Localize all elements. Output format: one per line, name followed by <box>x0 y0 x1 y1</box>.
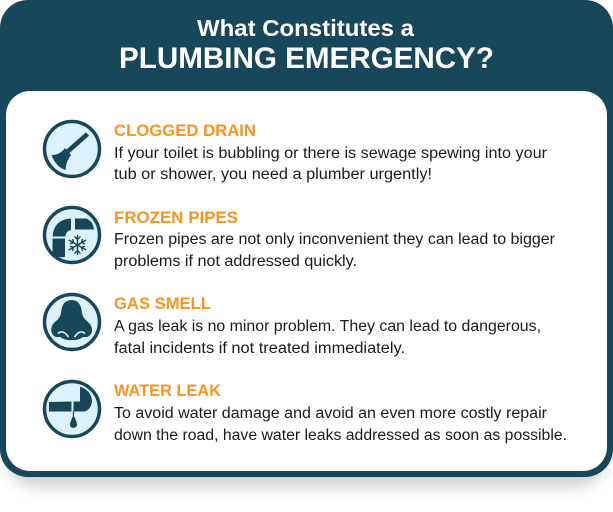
item: clogged drain <box>114 121 547 183</box>
title: What Constitutes a <box>197 15 414 41</box>
item: clogged drain: CLOGGED DRAIN <box>114 121 256 140</box>
item: gas smell: A gas leak is no minor problem. They can lead to dangerous, <box>114 318 541 335</box>
item: frozen pipes: problems if not addressed quickly. <box>114 253 357 270</box>
item: clogged drain: If your toilet is bubbling or there is sewage spewing into your <box>114 145 547 162</box>
item: frozen pipes: Frozen pipes are not only inconvenient they can lead to bigger <box>114 231 555 248</box>
item: water leak: To avoid water damage and avoid an even more costly repair <box>114 405 547 422</box>
icon: frozen pipes <box>44 208 100 262</box>
item: gas smell <box>114 294 541 357</box>
item: water leak: WATER LEAK <box>114 381 222 400</box>
item: clogged drain: tub or shower, you need a plumber urgently! <box>114 166 432 183</box>
icon: nose <box>44 294 100 350</box>
item: gas smell: fatal incidents if not treated immediately. <box>114 340 405 357</box>
item: water leak <box>114 381 567 444</box>
icon: water leak <box>44 382 100 436</box>
item: frozen pipes <box>114 208 555 270</box>
item: water leak: down the road, have water leaks addressed as soon as possible. <box>114 427 567 444</box>
white content panel <box>6 91 607 471</box>
title: PLUMBING EMERGENCY? <box>119 42 494 75</box>
item: frozen pipes: FROZEN PIPES <box>114 208 238 227</box>
item: gas smell: GAS SMELL <box>114 294 211 313</box>
title <box>119 15 494 75</box>
icon: plunger <box>44 122 100 176</box>
